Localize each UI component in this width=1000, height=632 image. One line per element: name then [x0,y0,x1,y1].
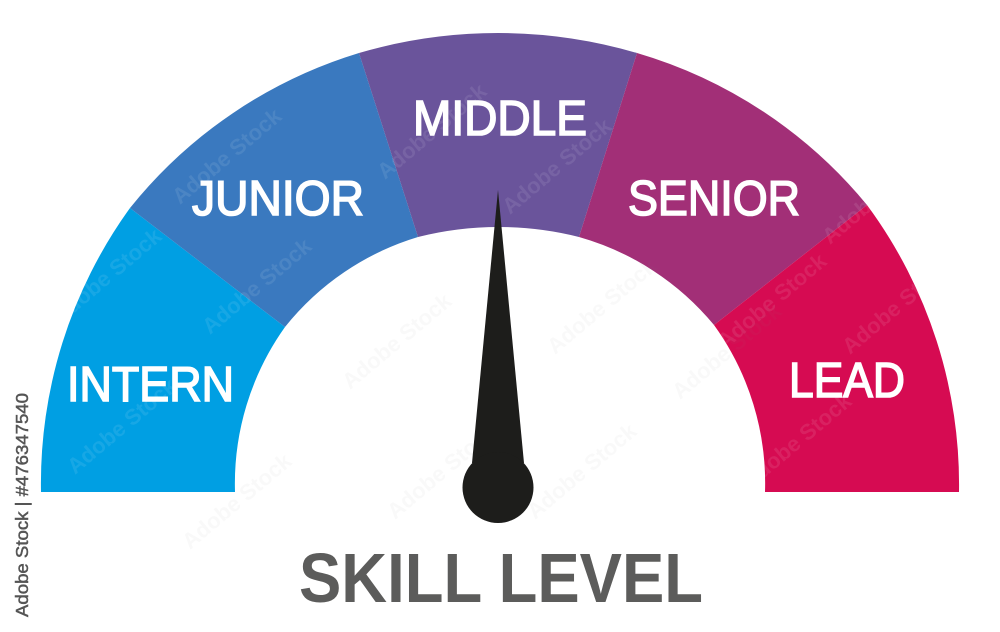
watermark pattern: Adobe Stock [337,288,457,394]
needle [462,190,534,523]
label: middle: MIDDLE [413,92,587,146]
watermark pattern: Adobe Stock [522,418,642,524]
watermark pattern [47,78,957,554]
segment: junior [130,53,418,327]
watermark pattern: Adobe Stock [167,103,287,209]
needle pointer [472,190,524,463]
watermark pattern: Adobe Stock [372,78,492,184]
watermark pattern: Adobe Stock [817,143,937,249]
label: senior: SENIOR [628,172,800,226]
label: junior: JUNIOR [192,172,364,226]
watermark pattern: Adobe Stock [497,113,617,219]
segment: intern [41,208,285,492]
vertical stock credit: Adobe Stock | #476347540 [12,393,32,617]
watermark pattern: Adobe Stock [62,373,182,479]
watermark pattern: Adobe Stock [177,448,297,554]
segment: lead [714,205,959,492]
watermark pattern: Adobe Stock [837,253,957,359]
watermark pattern: Adobe Stock [737,388,857,494]
label: lead: LEAD [789,354,905,408]
title: SKILL LEVEL [299,539,703,617]
watermark pattern: Adobe Stock [197,233,317,339]
segment: middle [359,33,637,237]
needle hub [462,452,534,523]
watermark pattern: Adobe Stock [382,418,502,524]
watermark pattern: Adobe Stock [542,253,662,359]
watermark pattern: Adobe Stock [47,223,167,329]
segment: senior [579,53,867,325]
label: intern: INTERN [67,358,234,412]
gauge arc [41,33,959,492]
watermark pattern: Adobe Stock [712,248,832,354]
watermark pattern: Adobe Stock [667,298,787,404]
